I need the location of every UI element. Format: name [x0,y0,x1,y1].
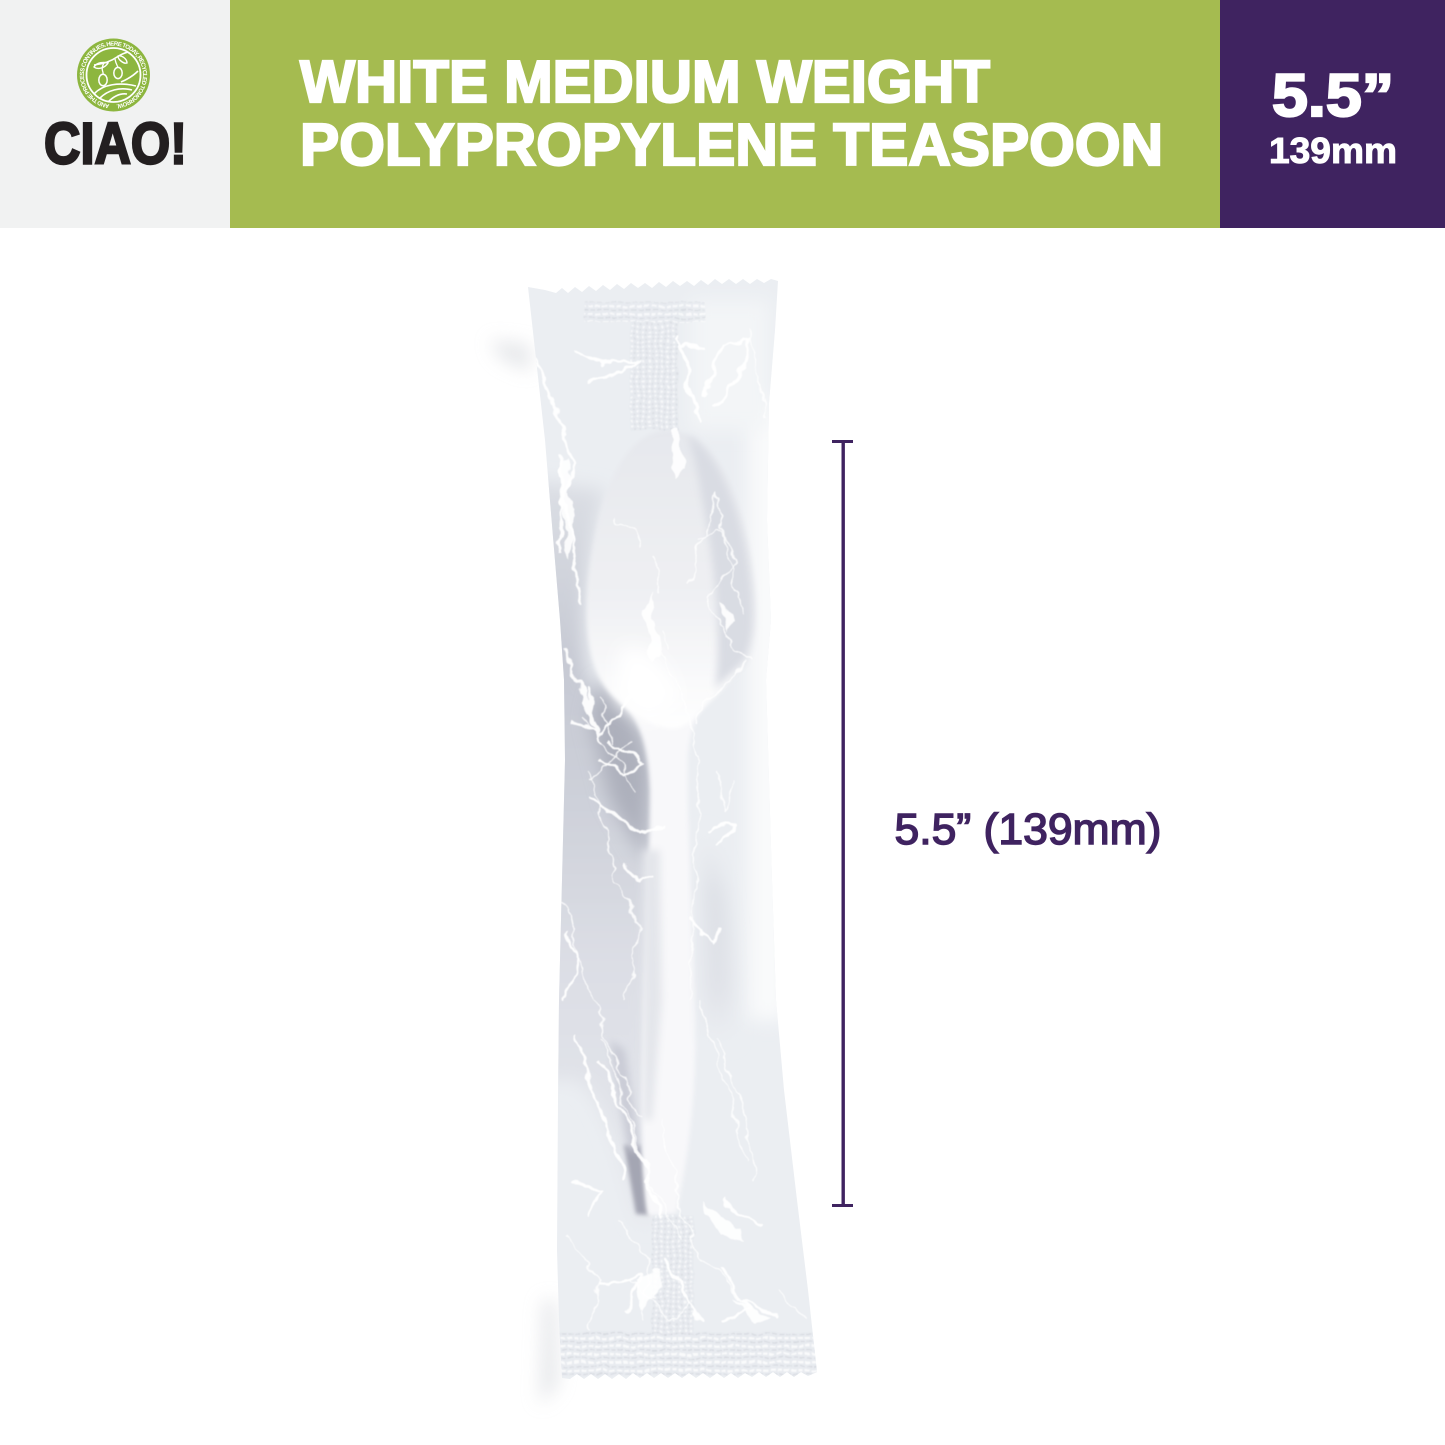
size panel [1220,0,1445,228]
spoon handle [628,710,694,1216]
size in inches: 5.5” [1272,62,1394,129]
icon: recycling olive branch badge: AND THE PROCESS CONTINUES. HERE TODAY, RECYCLED TOMORROW. [80,41,148,108]
soft shadow under wrapper [490,340,558,1405]
title text: WHITE MEDIUM WEIGHT [300,49,990,115]
title text: POLYPROPYLENE TEASPOON [300,112,1163,178]
film wrinkles [530,330,805,1330]
title text [300,49,1163,178]
seal embossing [552,302,822,1376]
brand name: CIAO! [44,112,187,176]
logo panel [0,0,230,228]
size in millimetres: 139mm [1269,130,1397,171]
wrapped teaspoon product photo [528,279,817,1379]
spoon shadow [548,483,650,1125]
bright wrinkle highlights [560,430,770,1325]
title panel [230,0,1220,228]
dimension line [832,440,853,1207]
header banner [0,0,1445,228]
plastic wrapper [528,279,817,1379]
spoon bowl [586,542,730,708]
dimension label: 5.5” (139mm) [894,805,1162,854]
